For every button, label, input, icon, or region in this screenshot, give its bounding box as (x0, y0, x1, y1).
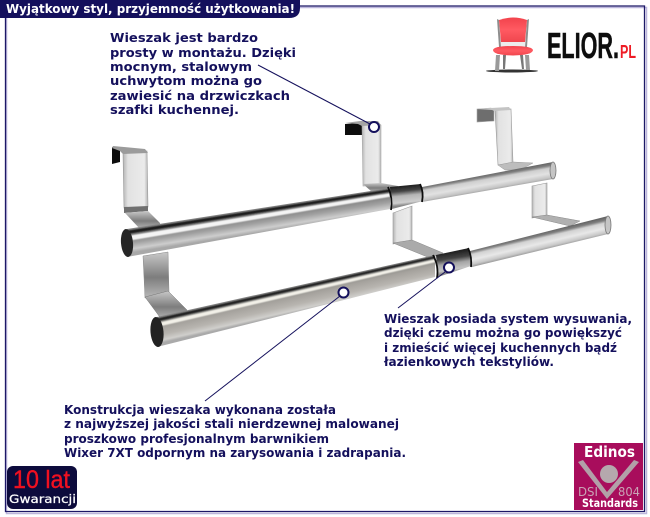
text block: system wysuwania: i zmieścić więcej kuchennych bądź (384, 341, 617, 355)
bracket: upper left (112, 146, 160, 229)
logo: Elior.pl (486, 18, 636, 72)
logo wordmark: PL (620, 42, 636, 62)
badge: Edinos DSI 804: Edinos (584, 443, 635, 461)
rod: lower (149, 216, 611, 348)
callout line: konstrukcja (205, 288, 348, 401)
badge: Edinos DSI 804: DSI (578, 485, 598, 499)
callout line: montaż (258, 65, 379, 132)
text block: konstrukcja (64, 403, 406, 460)
text block: konstrukcja: Wixer 7XT odpornym na zarysowania i zadrapania. (64, 446, 406, 460)
bracket: upper right (477, 107, 533, 170)
text block: system wysuwania: Wieszak posiada system wysuwania, (384, 312, 632, 326)
text block: konstrukcja: proszkowo profesjonalnym barwnikiem (64, 432, 329, 446)
bracket: lower middle (393, 206, 443, 258)
rod: upper (120, 162, 556, 257)
badge: 10 lat gwarancji (7, 466, 77, 509)
text block: system wysuwania (383, 312, 632, 369)
bracket: upper middle (345, 121, 398, 192)
badge: Edinos DSI 804 (574, 443, 643, 510)
icon: red chair (486, 18, 538, 72)
text block: montaż: mocnym, stalowym (110, 60, 252, 74)
product: towel rail (112, 107, 611, 348)
text block: montaż: prosty w montażu. Dzięki (110, 46, 296, 60)
text block: system wysuwania: łazienkowych tekstyliów. (383, 355, 554, 369)
text block: montaż (110, 31, 296, 117)
text block: konstrukcja: z najwyższej jakości stali nierdzewnej malowanej (64, 417, 399, 431)
badge: 10 lat gwarancji: 10 lat (13, 466, 70, 494)
bracket: lower left (143, 252, 187, 320)
text block: montaż: szafki kuchennej. (110, 103, 239, 117)
badge: Edinos DSI 804: Standards (582, 496, 638, 510)
text block: system wysuwania: dzięki czemu można go powiększyć (384, 326, 622, 340)
text block: montaż: uchwytom można go (110, 74, 262, 88)
badge: 10 lat gwarancji: Gwarancji (9, 492, 76, 506)
badge: Edinos DSI 804: 804 (618, 485, 640, 499)
text block: montaż: zawiesić na drzwiczkach (110, 89, 290, 103)
text block: konstrukcja: Konstrukcja wieszaka wykonana została (64, 403, 336, 417)
title banner: Wyjątkowy styl, przyjemność użytkowania! (6, 2, 295, 16)
callout line: system wysuwania (398, 262, 454, 308)
text block: montaż: Wieszak jest bardzo (110, 31, 258, 45)
bracket: lower right (532, 183, 580, 226)
